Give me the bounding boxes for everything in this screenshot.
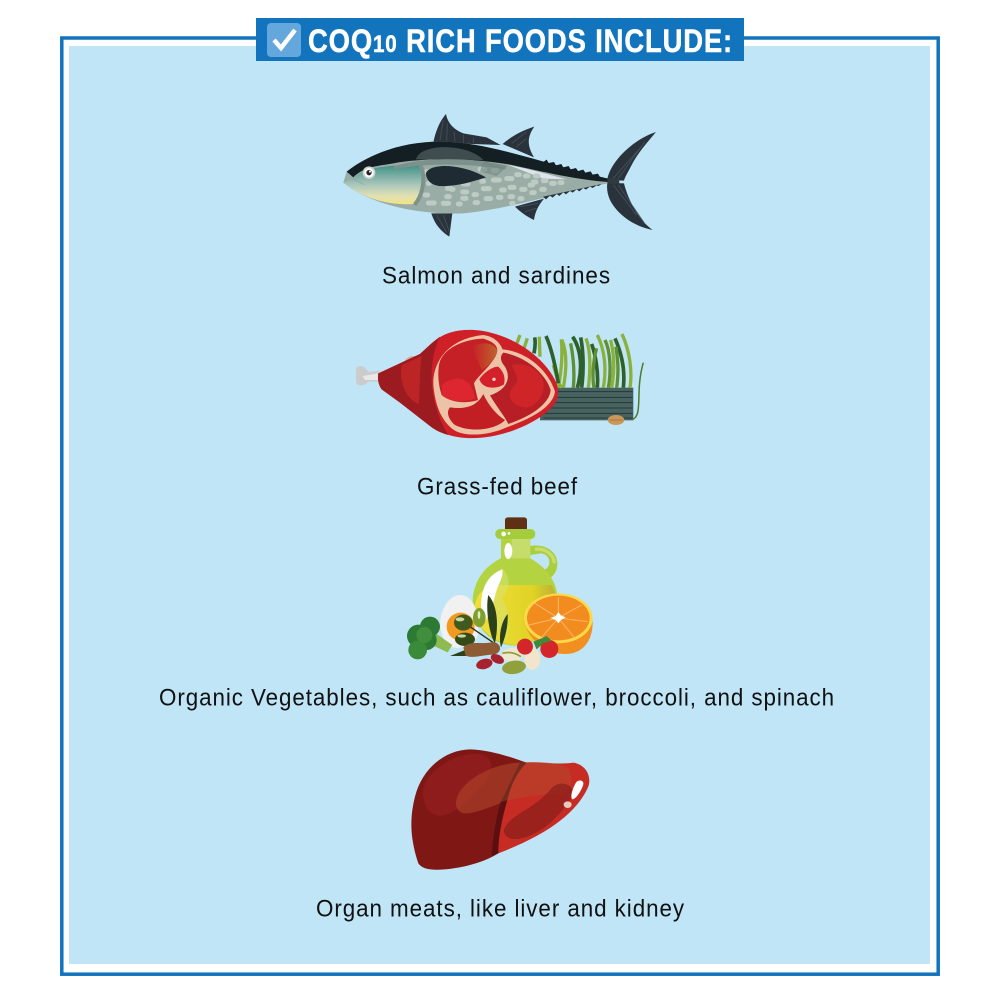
label: salmon and sardines: Salmon and sardines [382,262,611,290]
icon: grass tray [517,334,643,425]
icon: liver [411,749,589,870]
icon: beef leg [356,330,558,438]
panel: fish [343,114,656,237]
icon: check box [267,23,301,57]
icon: broccoli [407,617,452,659]
heading text: COQ10 RICH FOODS INCLUDE: [308,23,733,59]
label: grass-fed beef: Grass-fed beef [417,474,578,500]
panel: oil and vegetables [407,517,593,676]
icon: orange [524,593,593,654]
icon: nuts and berries [463,636,558,676]
label: organ meats: Organ meats, like liver and kidney [316,896,685,922]
icon: tuna fish [343,114,656,237]
heading banner [256,18,744,61]
icon: egg [440,595,479,648]
panel: liver [411,749,589,870]
label: organic vegetables: Organic Vegetables, such as cauliflower, broccoli, and spinach [159,684,835,712]
icon: oil bottle [473,517,558,646]
icon: olive branch [450,595,508,656]
panel: beef [356,330,643,438]
